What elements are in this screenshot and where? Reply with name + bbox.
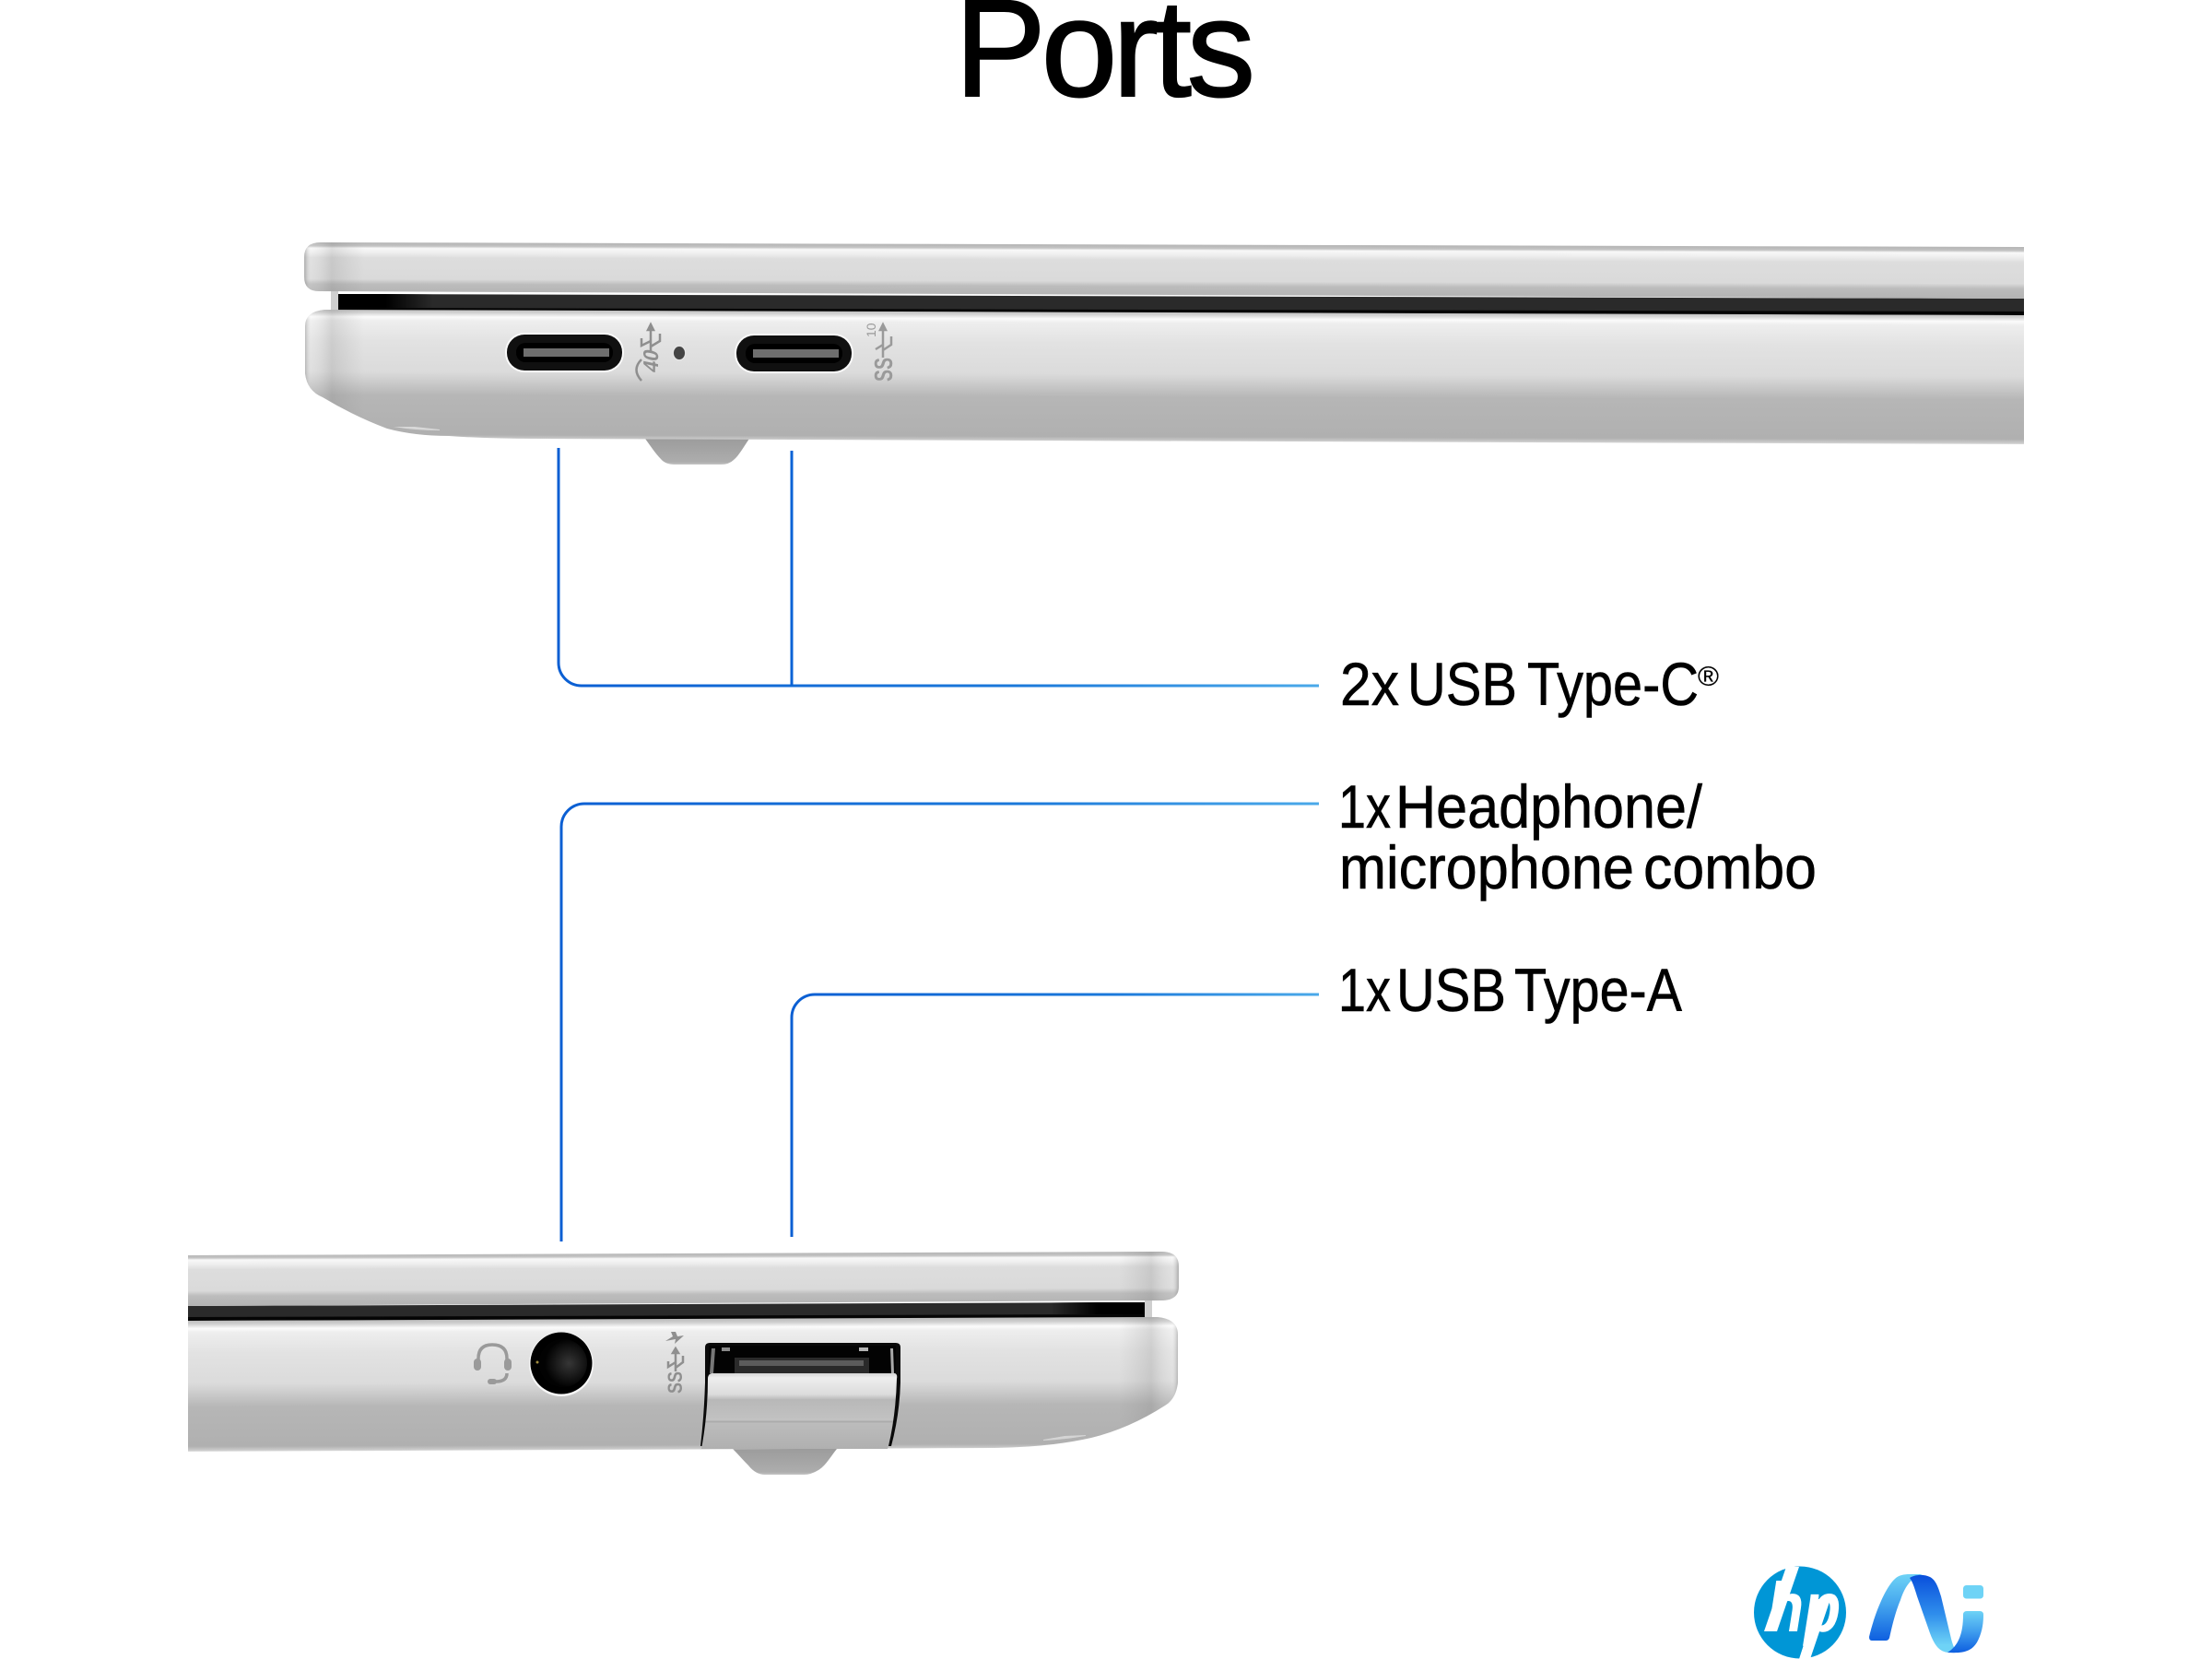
label: USB Type-C — [1340, 650, 1719, 718]
SuperSpeed 10 marking: 10 — [864, 323, 878, 337]
top laptop foot — [645, 439, 749, 465]
label: headphone combo: 1x — [1338, 772, 1391, 841]
label: USB Type-A: Type-A — [1514, 956, 1682, 1024]
top laptop: left side view — [304, 242, 2024, 465]
top laptop hinge gap — [331, 290, 2024, 315]
USB Type-A port with flap — [700, 1343, 900, 1449]
base highlight — [394, 427, 440, 430]
USB Type-C port 2 — [735, 334, 853, 373]
headphone jack — [529, 1332, 594, 1396]
label: headphone combo: combo — [1643, 833, 1817, 901]
logo: HP: hp — [1761, 1569, 1848, 1647]
label: headphone combo — [1338, 772, 1817, 901]
bottom laptop: right side view — [188, 1252, 1179, 1475]
Thunderbolt 40 marking: 40 — [639, 347, 663, 374]
icon: headset — [474, 1345, 512, 1384]
bottom laptop lid — [188, 1252, 1179, 1306]
label: headphone combo: microphone — [1339, 833, 1634, 901]
label: USB Type-C: 2x — [1340, 650, 1399, 718]
status LED — [673, 347, 686, 359]
SuperSpeed 10 marking — [864, 323, 898, 382]
logo: AI ribbon — [1869, 1574, 1983, 1653]
Thunderbolt 40 marking — [636, 324, 663, 381]
SuperSpeed marking — [664, 1332, 687, 1394]
label: USB Type-C: ® — [1698, 662, 1719, 692]
connector line: USB Type-A — [792, 994, 1319, 1237]
bottom laptop foot — [733, 1449, 837, 1475]
label: USB Type-C: USB — [1407, 650, 1517, 718]
label: USB Type-A: 1x — [1338, 956, 1391, 1024]
USB Type-C port 1 — [505, 333, 624, 372]
bottom laptop hinge gap — [188, 1300, 1152, 1321]
base highlight — [1043, 1435, 1086, 1441]
connector line: headphone — [561, 804, 1319, 1241]
label: USB Type-C: Type-C — [1527, 650, 1699, 718]
SuperSpeed marking: SS — [664, 1371, 687, 1394]
logo: HP — [1754, 1567, 1848, 1659]
top laptop base — [305, 310, 2024, 444]
top laptop lid — [304, 242, 2024, 299]
bottom laptop base — [188, 1317, 1178, 1452]
label: USB Type-A — [1338, 956, 1682, 1024]
label: headphone combo: Headphone/ — [1395, 772, 1703, 841]
label: USB Type-A: USB — [1396, 956, 1506, 1024]
SuperSpeed 10 marking: SS — [869, 358, 898, 382]
connector lines: USB Type-C — [559, 448, 1319, 686]
